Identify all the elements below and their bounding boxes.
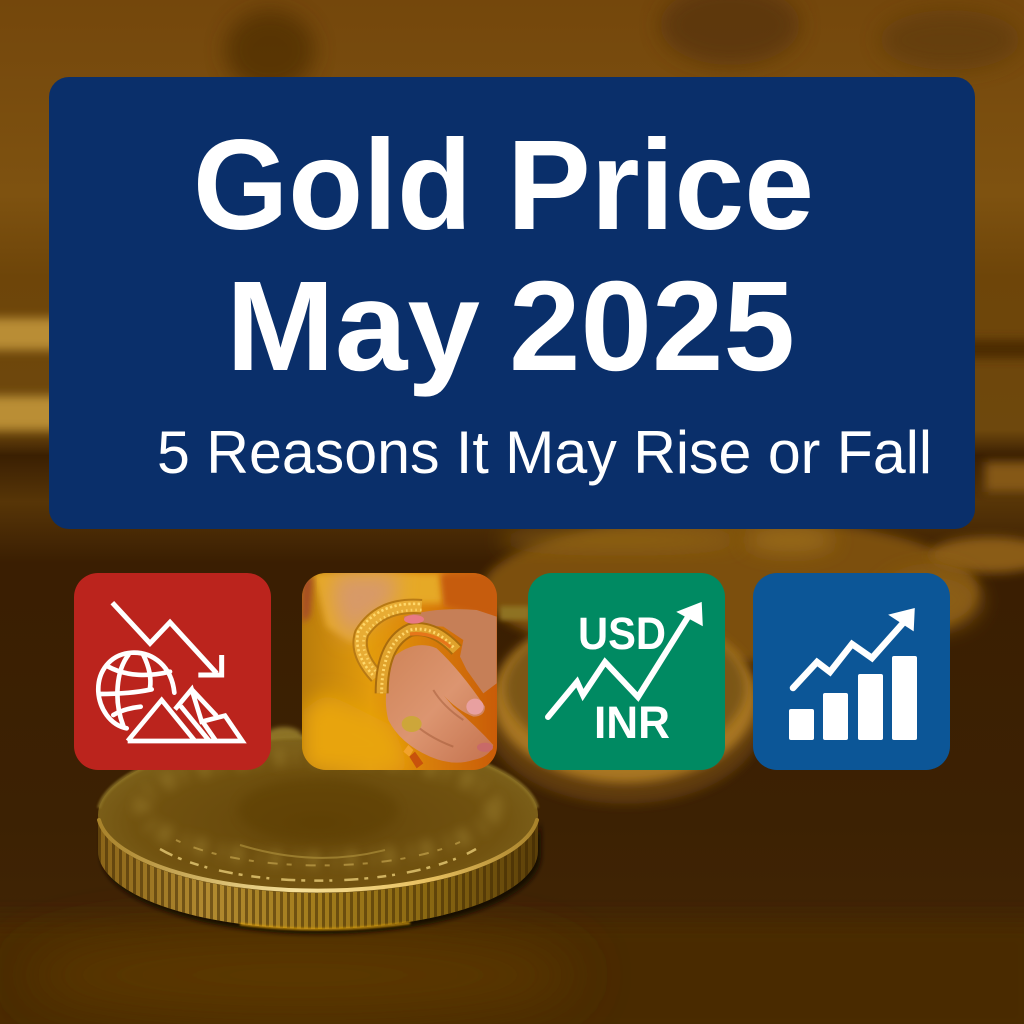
icon: mountains <box>128 689 242 741</box>
title: Price <box>507 114 814 257</box>
icon: growth bar chart <box>753 573 950 770</box>
arrow: growth trend <box>793 622 904 688</box>
title: May <box>226 255 480 398</box>
globe <box>98 653 174 728</box>
photo: hand with gold bangles <box>302 573 497 770</box>
icon: USD INR exchange rate: INR <box>594 697 670 748</box>
subtitle: 5 Reasons It May Rise or Fall <box>157 419 932 486</box>
title: 2025 <box>509 255 795 398</box>
panel: title banner <box>49 77 975 529</box>
icon: falling global markets <box>74 573 271 770</box>
icon: USD INR exchange rate: USD <box>578 608 666 659</box>
title: Gold <box>193 114 472 257</box>
bar chart <box>789 656 917 740</box>
icon: USD INR exchange rate <box>528 573 725 770</box>
hand: upper hand <box>403 609 497 693</box>
illustration: gold coin in foreground <box>96 737 541 935</box>
bangles <box>360 606 422 677</box>
arrow: falling trend <box>112 603 222 675</box>
hand: main hand <box>386 645 493 763</box>
arrow: rising trend <box>548 617 688 717</box>
title <box>193 114 814 398</box>
